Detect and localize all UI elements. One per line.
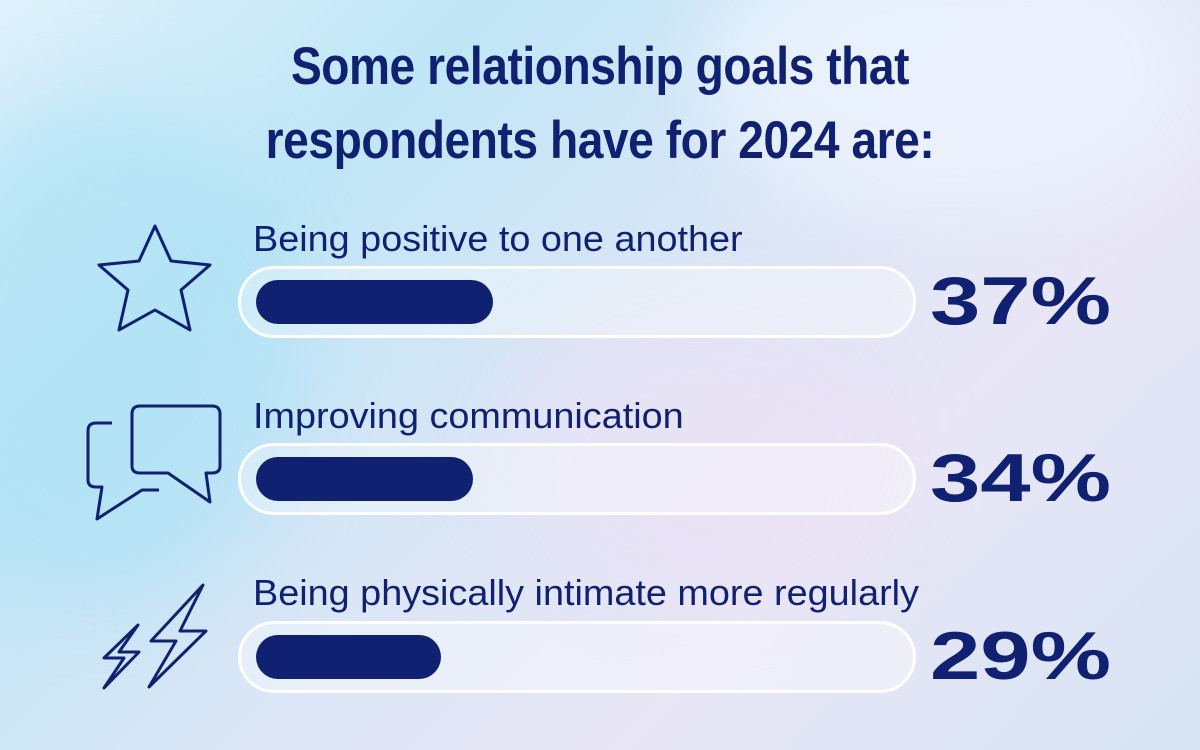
label 1: Being positive to one another: [253, 218, 743, 259]
bar 3: [238, 621, 916, 693]
label 2: Improving communication: [253, 395, 684, 436]
pct 1: 37%: [930, 263, 1111, 339]
pct 3: 29%: [930, 618, 1111, 694]
pct 2: 34%: [930, 440, 1111, 516]
icon: speech bubbles: [86, 404, 222, 520]
icon: star: [97, 224, 212, 332]
bar 2: [238, 443, 916, 515]
label 3: Being physically intimate more regularly: [253, 572, 919, 613]
title: [266, 37, 934, 170]
title: respondents have for 2024 are:: [266, 111, 934, 170]
icon: lightning: [102, 584, 208, 690]
bar 1: [238, 266, 916, 338]
title: Some relationship goals that: [291, 37, 909, 96]
